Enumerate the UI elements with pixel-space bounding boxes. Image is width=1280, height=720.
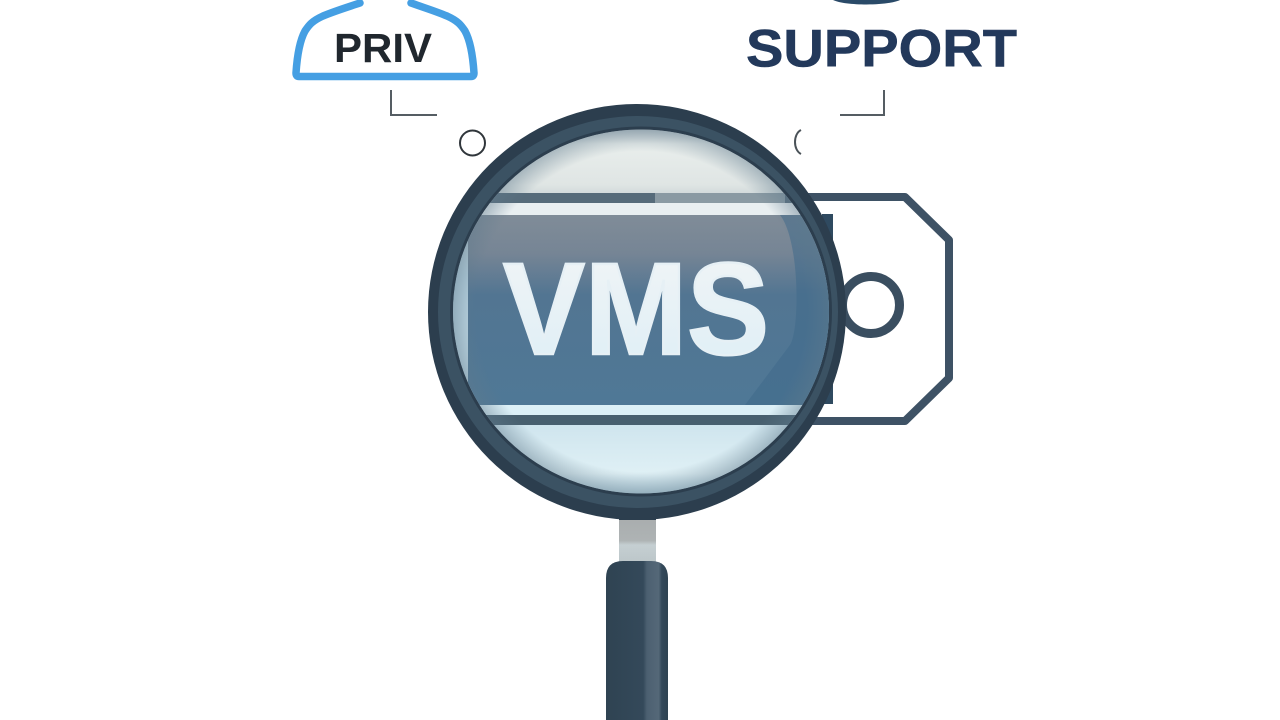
VMS text: VMS <box>503 235 769 382</box>
badge outline <box>296 3 474 76</box>
connector bracket left <box>391 90 437 115</box>
blue label panel <box>468 215 838 405</box>
lens rim shading <box>453 130 829 494</box>
right shade on panel <box>746 215 829 405</box>
connector bracket right <box>840 90 884 115</box>
bottom dark band <box>486 415 796 425</box>
partial circle node <box>795 130 801 154</box>
label: SUPPORT <box>746 0 1017 78</box>
icon remnant above SUPPORT <box>833 0 900 4</box>
PRIV text: PRIV <box>334 25 433 71</box>
lens glass <box>440 125 840 500</box>
lens contents <box>440 125 840 500</box>
tag behind magnifier <box>790 197 949 421</box>
tag inner edge <box>822 214 833 404</box>
top dark band <box>490 193 792 203</box>
label: PRIV badge <box>296 3 474 76</box>
lens frame mid ring <box>438 116 838 508</box>
top light band <box>482 203 800 215</box>
magnifier lens <box>428 104 846 520</box>
small circle node <box>460 130 485 156</box>
lens frame inner edge <box>450 126 832 496</box>
handle grip <box>606 561 668 720</box>
lens frame <box>428 104 846 520</box>
tag outline <box>790 197 949 421</box>
handle neck <box>619 518 656 563</box>
SUPPORT text: SUPPORT <box>746 20 1017 78</box>
band glare <box>655 193 785 203</box>
infographic: magnifying glass over VMS tag <box>292 0 1017 720</box>
handle <box>606 518 668 720</box>
neck shadow <box>619 518 656 520</box>
tag ring <box>842 276 900 334</box>
bottom light band <box>480 405 802 415</box>
